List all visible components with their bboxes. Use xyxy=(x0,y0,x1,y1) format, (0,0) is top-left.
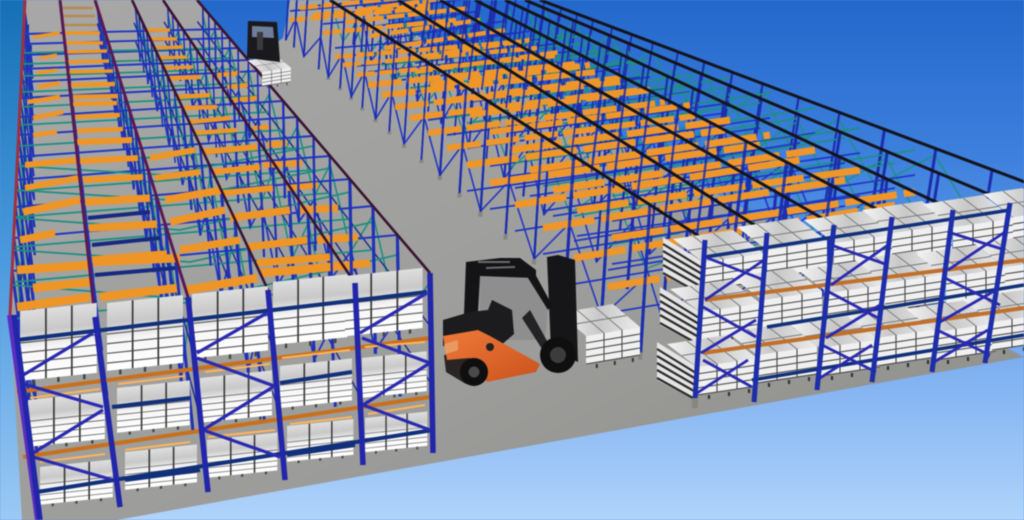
forklift cab and canopy xyxy=(464,258,552,352)
right rack block: pallets of white bags xyxy=(657,185,1024,399)
forklift front wheel xyxy=(540,337,576,373)
right rack block: depth frames and bracing xyxy=(281,0,1024,378)
right rack block: black top rails xyxy=(330,0,1024,240)
left rack block: orange load beams xyxy=(17,8,370,307)
right rack block: upright overlay xyxy=(280,0,892,400)
left rack block: cross beams xyxy=(12,29,397,319)
far forklift with pallet xyxy=(247,21,291,88)
left rack block: front frame xyxy=(10,273,433,520)
right rack block: rear posts xyxy=(280,0,1010,402)
left rack block: upright overlay and rails xyxy=(10,0,433,453)
left rack block: pallets of white bags xyxy=(20,268,427,508)
forklift orange body xyxy=(443,330,540,382)
pallet carried by near forklift xyxy=(559,304,640,368)
right rack block: front frame xyxy=(695,203,1024,408)
left rack block: rear posts xyxy=(61,7,433,507)
right rack block: orange load beams xyxy=(290,0,915,287)
forklift seat and hood xyxy=(443,300,514,346)
right rack block: cross beams xyxy=(290,0,915,313)
left rack block: depth frames and bracing xyxy=(10,8,432,520)
near orange forklift xyxy=(443,255,578,386)
forklift mast xyxy=(547,255,578,362)
forklift black base xyxy=(444,352,488,384)
forklift rear wheel xyxy=(460,358,488,386)
